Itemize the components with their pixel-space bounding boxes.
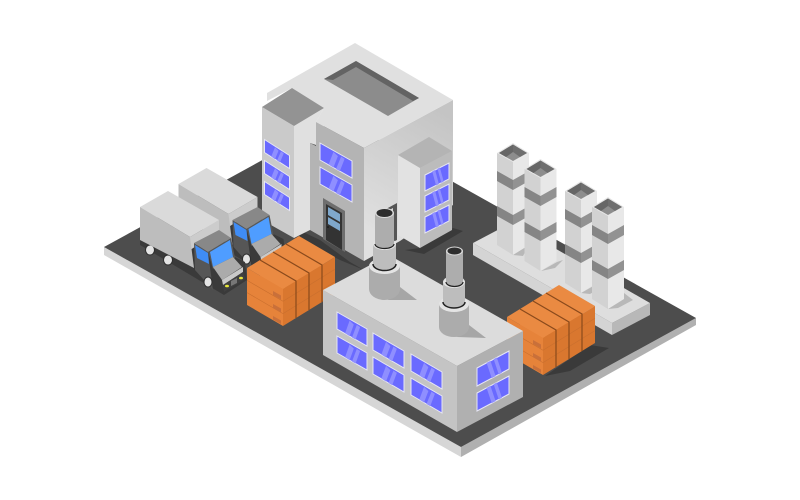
rear truck <box>178 168 286 272</box>
ground platform <box>104 118 696 457</box>
stack platform <box>473 223 650 335</box>
left tower <box>262 88 324 238</box>
skylight <box>324 61 419 116</box>
smoke stacks <box>497 143 624 309</box>
factory block <box>323 208 523 432</box>
front truck <box>140 191 247 295</box>
chimney left <box>369 208 417 300</box>
door <box>323 198 345 252</box>
crates near trucks <box>247 236 335 326</box>
rear door <box>386 203 397 242</box>
right tower <box>398 137 452 248</box>
crates right <box>507 285 595 375</box>
main building <box>262 43 453 261</box>
shadows on ground <box>296 228 609 376</box>
chimney right <box>439 246 486 338</box>
factory windows <box>337 312 509 413</box>
centre windows <box>320 143 352 202</box>
